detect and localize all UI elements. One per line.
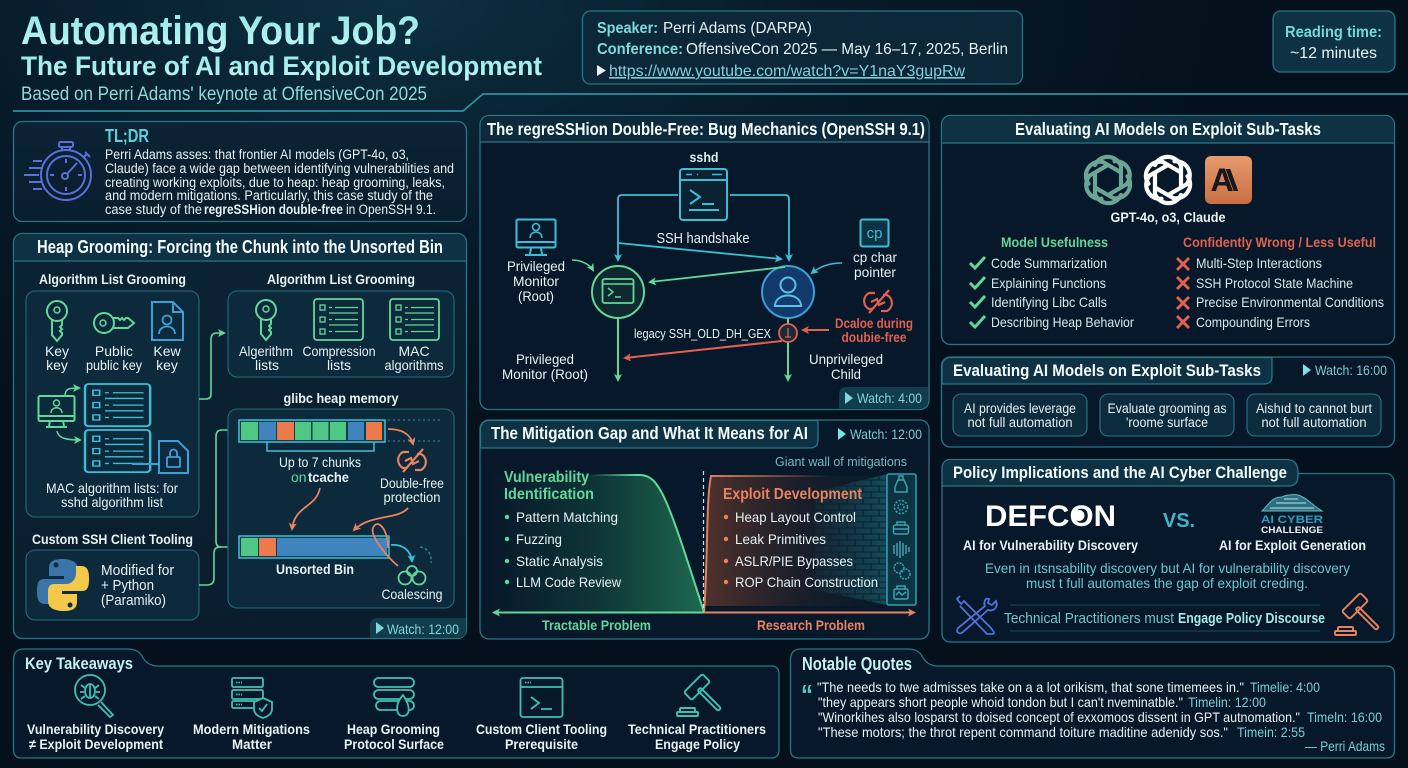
watch badge: Watch: 4:00 — [857, 390, 922, 406]
box: algorithm lists: lists — [255, 357, 279, 373]
text: exploit development: ROP Chain Construction — [735, 574, 878, 590]
label: tractable problem: Tractable Problem — [542, 617, 651, 633]
quote 1: "The needs to twe admisses take on a a lot orikism, that sone timemees in." — [817, 679, 1244, 695]
heading: Key Takeaways — [25, 654, 133, 673]
box: key material: Key — [45, 343, 69, 359]
card: leverage: not full automation — [968, 415, 1072, 430]
box: key material: MAC algorithm lists: for — [46, 480, 178, 496]
box: glibc heap memory: Up to 7 chunks — [279, 454, 361, 470]
panel: speaker info: Perri Adams (DARPA) — [663, 20, 812, 37]
box: python tooling: + Python — [101, 577, 154, 594]
panel: reading time — [1273, 11, 1395, 72]
box: algorithm lists: MAC — [398, 343, 430, 359]
tab header — [480, 420, 818, 448]
tab header — [942, 459, 1298, 486]
panel: evaluating AI models leverage — [942, 357, 1394, 447]
icon: Claude: I — [1221, 163, 1243, 199]
heading: Evaluating AI Models on Exploit Sub-Tasks — [1015, 119, 1321, 139]
icon: cp: cp — [867, 225, 882, 242]
card: grooming — [1100, 394, 1234, 436]
label: models: GPT-4o, o3, Claude — [1110, 209, 1226, 225]
box: algorithm lists: algorithms — [384, 357, 444, 373]
label: privileged monitor root: Privileged — [516, 351, 574, 367]
box: algorithm lists: Compression — [302, 343, 376, 359]
chart: exploit area — [704, 476, 890, 612]
list: model usefulness — [970, 234, 1134, 330]
panel: notable quotes — [790, 649, 1394, 758]
arrows: handshake — [618, 195, 789, 260]
panel: speaker info: https://www.youtube.com/watch?v=Y1naY3gupRw — [609, 63, 965, 80]
card: grooming: 'roome surface — [1126, 415, 1208, 430]
icon: o3 — [1141, 157, 1195, 203]
text: vulnerability identification: Pattern Matching — [516, 509, 618, 525]
takeaway: vulnerability discovery: Vulnerability Discovery — [27, 721, 164, 737]
summary text: Perri Adams asses: that frontier AI models (GPT-4o, o3, — [105, 147, 409, 162]
takeaway: modern mitigations — [193, 678, 310, 752]
takeaway: heap grooming: Protocol Surface — [344, 736, 444, 752]
takeaway: heap grooming: Heap Grooming — [347, 721, 440, 737]
summary text: creating working exploits, due to heap: heap grooming, leaks, — [105, 175, 445, 190]
box: glibc heap memory: tcache — [308, 469, 349, 485]
box: glibc heap memory: Coalescing — [382, 586, 442, 602]
heading: TL;DR — [105, 126, 149, 146]
panel: policy implications — [942, 459, 1394, 642]
text: exploit development: Exploit Development — [723, 486, 863, 503]
summary text: in OpenSSH 9.1. — [346, 202, 436, 217]
box: glibc heap memory: Unsorted Bin — [276, 561, 354, 577]
quote 4: Timein: 2:55 — [1237, 724, 1305, 740]
box: algorithm lists — [228, 291, 454, 377]
quote 3: "Winorkihes also losparst to doised concept of exxomoos dissent in GPT autnomation." — [818, 709, 1300, 725]
arrow: cp pointer — [812, 263, 842, 273]
heading: Policy Implications and the AI Cyber Challenge — [953, 463, 1287, 482]
axis arrows — [494, 612, 914, 614]
quote 4: "These motors; the throt repent command toiture maditine adenidy sos." — [818, 724, 1228, 740]
callout: engage policy — [1004, 605, 1325, 631]
callout: double free — [835, 315, 913, 345]
tab header — [942, 358, 1272, 384]
chart: vulnerability area — [490, 475, 704, 612]
icon: gavel — [1335, 593, 1379, 635]
icon: Claude: A — [1210, 162, 1234, 198]
brick wall — [815, 474, 887, 605]
subtitle: The Future of AI and Exploit Development — [21, 51, 542, 81]
logo: AI Cyber Challenge — [1261, 495, 1323, 536]
title: Automating Your Job? — [21, 9, 420, 53]
box: key material: Public — [95, 343, 133, 359]
panel: mitigation gap — [480, 420, 929, 639]
icon: free marker — [779, 324, 797, 342]
list: model usefulness: Code Summarization — [991, 255, 1107, 271]
node: monitor process — [592, 266, 644, 318]
takeaway: technical practitioners: Technical Practitioners — [628, 721, 766, 737]
card: automation: Aishıd to cannot burt — [1256, 401, 1372, 416]
label: unprivileged child: Unprivileged — [809, 351, 883, 367]
box: python tooling: (Paramiko) — [101, 592, 166, 609]
label: research problem: Research Problem — [757, 617, 865, 633]
text: exploit development: Heap Layout Control — [735, 509, 856, 525]
callout: engage policy: Technical Practitioners must — [1004, 610, 1175, 627]
quote 1: Timelie: 4:00 — [1250, 679, 1320, 695]
label: unprivileged child: Child — [831, 366, 861, 382]
panel: speaker info — [582, 11, 1022, 84]
text: exploit development: ASLR/PIE Bypasses — [735, 553, 853, 569]
subheading: Custom SSH Client Tooling — [32, 531, 193, 547]
list: confidently wrong — [1177, 234, 1384, 330]
attribution: — Perri Adams — [1305, 738, 1385, 754]
text: vulnerability identification: Fuzzing — [516, 531, 562, 547]
text: vulnerability identification — [504, 469, 622, 590]
card: automation: not full automation — [1262, 415, 1366, 430]
text: vulnerability identification: LLM Code Review — [516, 574, 622, 590]
label: cp char pointer: pointer — [854, 264, 896, 280]
label: AI for vulnerability discovery: AI for Vulnerability Discovery — [963, 537, 1138, 553]
icon: quote mark: “ — [801, 679, 813, 709]
box: key material: key — [156, 357, 178, 373]
quote 2: "they appears short people whoid tondon but I can't nveminatble." — [818, 694, 1183, 710]
text: exploit development: Leak Primitives — [735, 531, 826, 547]
panel: TL;DR — [14, 122, 466, 222]
takeaway: technical practitioners: Engage Policy — [655, 736, 740, 752]
header: title block — [21, 9, 542, 105]
box: key material: key — [46, 357, 68, 373]
logo: DEFCON: DEFCON — [985, 500, 1116, 533]
label: vs: VS. — [1163, 510, 1195, 532]
summary text: Claude) face a wide gap between identifying vulnerabilities and — [105, 161, 454, 176]
label: SSH handshake: SSH handshake — [656, 230, 750, 247]
node: child process — [762, 266, 814, 318]
text: policy summary: must t full automates the gap of exploit creding. — [1026, 575, 1308, 591]
text: vulnerability identification: Static Analysis — [516, 553, 603, 569]
label: privileged monitor — [507, 258, 565, 304]
takeaway: custom client tooling: Custom Client Tooling — [476, 721, 607, 737]
subheading: glibc heap memory — [284, 390, 399, 406]
panel: speaker info: Speaker: — [597, 20, 658, 37]
icon: GPT-4o — [1081, 157, 1135, 203]
watch badge: Watch: 12:00 — [387, 621, 459, 637]
list: model usefulness: Model Usefulness — [1001, 234, 1108, 250]
panel: evaluating AI models — [942, 116, 1394, 344]
subheading: Algorithm List Grooming — [39, 271, 186, 287]
box: python tooling: Modified for — [101, 562, 174, 579]
heading: Heap Grooming: Forcing the Chunk into the Unsorted Bin — [37, 237, 443, 257]
box: key material: public key — [86, 357, 142, 373]
takeaway: modern mitigations: Matter — [232, 736, 273, 752]
label: privileged monitor root — [502, 351, 588, 382]
heading: Notable Quotes — [802, 654, 912, 674]
text: vulnerability identification: Vulnerability — [504, 469, 589, 486]
label: cp char pointer: cp char — [853, 249, 897, 265]
panel: reading time: Reading time: — [1285, 24, 1382, 41]
icon: privileged monitor — [516, 220, 556, 255]
icon: terminal — [680, 169, 727, 220]
card: leverage: AI provides leverage — [964, 401, 1076, 416]
takeaway: custom client tooling — [476, 678, 607, 752]
heading: Evaluating AI Models on Exploit Sub-Tasks — [953, 361, 1261, 380]
takeaway: custom client tooling: Prerequisite — [505, 736, 578, 752]
mitigation icons column — [887, 474, 916, 605]
label: privileged monitor: Privileged — [507, 258, 565, 274]
label: privileged monitor: (Root) — [518, 288, 554, 304]
box: glibc heap memory: protection — [384, 489, 440, 505]
panel: speaker info: OffensiveCon 2025 — May 16–17, 2025, Berlin — [686, 41, 1008, 58]
box: key material — [26, 291, 199, 517]
divider: gap — [702, 471, 704, 612]
label: sshd: sshd — [690, 149, 718, 165]
callout: engage policy: Engage Policy Discourse — [1178, 610, 1325, 627]
label: privileged monitor: Monitor — [513, 273, 559, 289]
box: python tooling — [26, 550, 199, 620]
list: confidently wrong: Precise Environmental Conditions — [1196, 294, 1384, 310]
text: policy summary — [985, 560, 1350, 591]
arrow: child to monitor — [650, 267, 785, 282]
icon: cp — [860, 220, 888, 246]
subheading: Algorithm List Grooming — [267, 271, 415, 287]
watch link: Watch: 16:00 — [1315, 362, 1387, 378]
summary text — [105, 147, 454, 217]
byline: Based on Perri Adams' keynote at OffensiveCon 2025 — [21, 84, 427, 105]
takeaway: vulnerability discovery: ≠ Exploit Development — [29, 736, 163, 752]
icon: stopwatch — [24, 142, 91, 200]
box: algorithm lists: lists — [327, 357, 351, 373]
icon: broken link — [864, 290, 892, 313]
box: glibc heap memory — [228, 409, 454, 608]
list: model usefulness: Identifying Libc Calls — [991, 294, 1107, 310]
arrows: grooming connectors — [199, 333, 233, 585]
list: confidently wrong: SSH Protocol State Machine — [1196, 275, 1353, 291]
label: unprivileged child — [809, 351, 883, 382]
text: exploit development — [723, 486, 878, 590]
text: vulnerability identification: Identification — [504, 486, 594, 503]
label: AI for exploit generation: AI for Exploit Generation — [1219, 537, 1366, 553]
panel: reading time: ~12 minutes — [1290, 45, 1377, 62]
heading: The regreSSHion Double-Free: Bug Mechanics (OpenSSH 9.1) — [487, 119, 925, 139]
list: confidently wrong: Confidently Wrong / Less Useful — [1183, 234, 1376, 250]
card: grooming: Evaluate grooming as — [1108, 401, 1227, 416]
list: model usefulness: Explaining Functions — [991, 275, 1106, 291]
quote 3: Timeln: 16:00 — [1307, 709, 1382, 725]
summary text: case study of the — [105, 202, 202, 217]
takeaway: modern mitigations: Modern Mitigations — [193, 721, 310, 737]
logo: AI Cyber Challenge: AI CYBER — [1261, 514, 1323, 526]
label: cp char pointer — [853, 249, 897, 280]
list: model usefulness: Describing Heap Behavior — [991, 314, 1134, 330]
box: glibc heap memory: Double-free — [380, 475, 444, 491]
box: glibc heap memory: on — [291, 469, 307, 485]
callout: double free: doubie-free — [842, 329, 907, 345]
summary text: and modern mitigations. Particularly, this case study of the — [105, 188, 433, 203]
label: wall of mitigations: Giant wall of mitigations — [775, 454, 907, 469]
watch badge — [839, 387, 928, 408]
callout: double free: Dcaloe during — [835, 315, 913, 331]
label: legacy path: legacy SSH_OLD_DH_GEX — [634, 326, 771, 341]
quote 2: Timelin: 12:00 — [1188, 694, 1266, 710]
icon: tools — [957, 596, 997, 634]
icon: Claude — [1205, 156, 1252, 204]
text: policy summary: Even in ıtsnsability discovery but AI for vulnerability discovery — [985, 560, 1350, 576]
arrows: process lifelines — [618, 318, 829, 380]
label: privileged monitor root: Monitor (Root) — [502, 366, 588, 382]
card: automation — [1247, 394, 1381, 436]
list: confidently wrong: Multi-Step Interactions — [1196, 255, 1322, 271]
box: algorithm lists: Algerithm — [239, 343, 293, 359]
panel: heap grooming — [14, 234, 466, 638]
arrow: monitor pointer — [572, 260, 593, 270]
list: confidently wrong: Compounding Errors — [1196, 314, 1310, 330]
card: leverage — [953, 394, 1087, 436]
panel: key takeaways — [14, 649, 779, 758]
box: key material: sshd algorithm list — [61, 494, 163, 510]
box: key material: Kew — [153, 343, 182, 359]
panel: regreSSHion bug mechanics — [480, 116, 929, 410]
takeaway: vulnerability discovery — [27, 675, 164, 752]
heading: The Mitigation Gap and What It Means for AI — [491, 423, 808, 443]
watch badge — [370, 618, 466, 638]
logo: AI Cyber Challenge: CHALLENGE — [1261, 525, 1323, 536]
summary text: regreSSHion double-free — [204, 202, 343, 217]
takeaway: heap grooming — [344, 678, 444, 752]
watch link: Watch: 12:00 — [850, 426, 922, 442]
takeaway: technical practitioners — [628, 674, 766, 752]
panel: speaker info: Conference: — [597, 41, 683, 58]
